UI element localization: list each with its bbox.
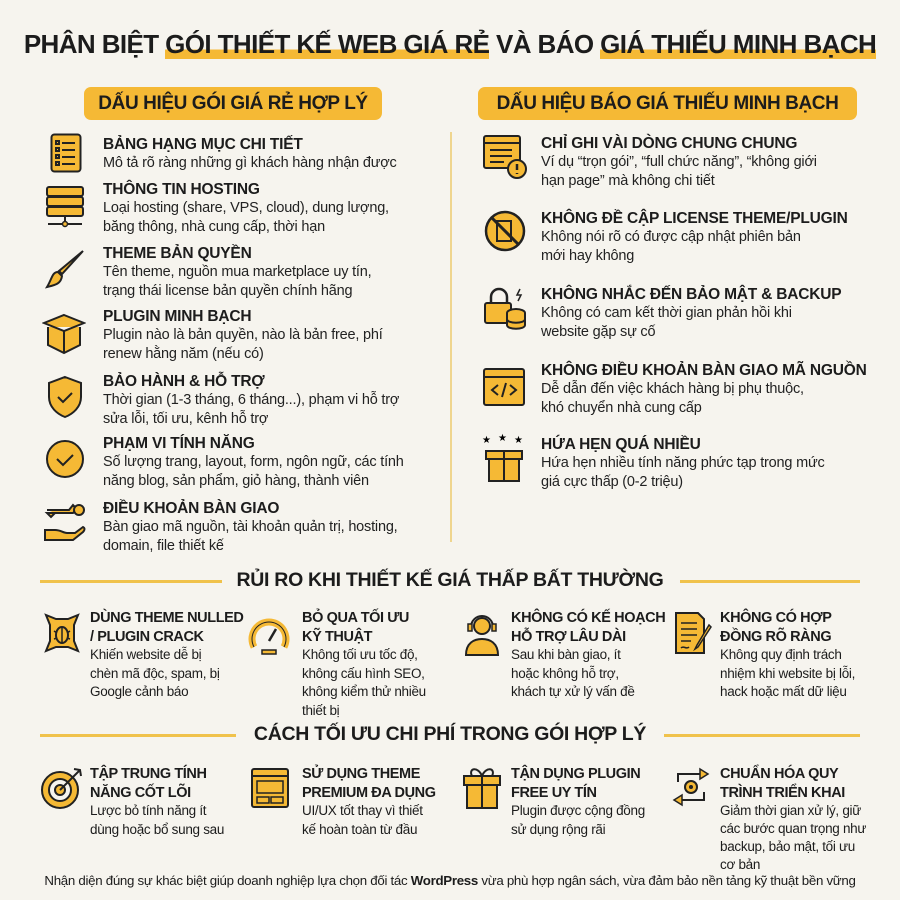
item: điều khoản: domain, file thiết kế	[103, 538, 224, 554]
item: bảo hành	[103, 372, 399, 427]
item: bảo hành: sửa lỗi, tối ưu, kênh hỗ trợ	[103, 411, 268, 427]
item: phạm vi: năng blog, sản phẩm, giỏ hàng, thành viên	[103, 473, 369, 489]
icon: check circle	[46, 440, 84, 478]
icon: box	[42, 314, 86, 354]
item: vài dòng chung chung: Ví dụ “trọn gói”, “full chức năng”, “không giới	[541, 154, 817, 170]
item: theme premium: UI/UX tốt thay vì thiết	[302, 803, 423, 818]
item: hỗ trợ: hoặc không hỗ trợ,	[511, 666, 619, 680]
item: theme premium: kế hoàn toàn từ đầu	[302, 822, 417, 836]
item: license	[541, 208, 848, 264]
right header pill: DẤU HIỆU BÁO GIÁ THIẾU MINH BẠCH	[497, 93, 838, 114]
item: plugin: renew hằng năm (nếu có)	[103, 346, 264, 362]
icon: gift stars: ★	[514, 435, 523, 446]
item: điều khoản: ĐIỀU KHOẢN BÀN GIAO	[103, 500, 279, 517]
item: tối ưu: KỸ THUẬT	[302, 628, 372, 644]
item: vài dòng chung chung: CHỈ GHI VÀI DÒNG CHUNG CHUNG	[541, 135, 797, 152]
item: tập trung: dùng hoặc bổ sung sau	[90, 822, 224, 836]
item: hỗ trợ: HỖ TRỢ LÂU DÀI	[511, 628, 626, 644]
left header pill: DẤU HIỆU GÓI GIÁ RẺ HỢP LÝ	[98, 93, 368, 114]
item: nulled: DÙNG THEME NULLED	[90, 610, 244, 626]
icon: server	[46, 186, 84, 228]
item: plugin free	[511, 765, 645, 839]
icon: checklist	[50, 134, 82, 172]
icon: lock database	[484, 288, 526, 330]
item: hosting: THÔNG TIN HOSTING	[103, 181, 260, 198]
item: hosting: băng thông, nhà cung cấp, thời hạn	[103, 219, 325, 235]
item: mã nguồn	[541, 360, 867, 416]
panel: left column	[42, 134, 404, 554]
item: chuẩn hóa: TRÌNH TRIỂN KHAI	[720, 784, 845, 800]
item: hosting: Loại hosting (share, VPS, cloud), dung lượng,	[103, 200, 389, 216]
item: bảng hạng mục: BẢNG HẠNG MỤC CHI TIẾT	[103, 136, 303, 153]
item: plugin free: sử dụng rộng rãi	[511, 822, 605, 836]
item: plugin free: Plugin được cộng đồng	[511, 803, 645, 818]
item: hợp đồng: KHÔNG CÓ HỢP	[720, 610, 832, 626]
item: hứa hẹn: giá cực thấp (0-2 triệu)	[541, 474, 683, 490]
item: phạm vi	[103, 434, 404, 489]
footer text: Nhận diện đúng sự khác biệt giúp doanh nghiệp lựa chọn đối tác WordPress vừa phù hợp ngân sách, vừa đảm bảo nền tảng kỹ thuật bền vững	[44, 873, 856, 888]
icon: target	[41, 768, 82, 809]
item: bảo mật: KHÔNG NHẮC ĐẾN BẢO MẬT & BACKUP	[541, 286, 841, 303]
icon: gift stars: ★	[482, 435, 491, 446]
item: hợp đồng: ĐỒNG RÕ RÀNG	[720, 628, 831, 644]
item: hỗ trợ	[511, 608, 665, 699]
item: hỗ trợ: Sau khi bàn giao, ít	[511, 647, 621, 662]
item: chuẩn hóa: các bước quan trọng như	[720, 821, 866, 836]
right header pill	[478, 87, 857, 120]
icon: gift stars	[482, 433, 523, 482]
item: hứa hẹn: Hứa hẹn nhiều tính năng phức tạp trong mức	[541, 455, 825, 471]
item: license: mới hay không	[541, 248, 634, 264]
panel: right column	[482, 134, 867, 490]
item: nulled	[90, 608, 244, 699]
item: theme premium: SỬ DỤNG THEME	[302, 766, 420, 782]
item: bảo mật	[541, 284, 842, 340]
item: tối ưu: Không tối ưu tốc độ,	[302, 647, 418, 662]
section heading: risks	[40, 568, 860, 591]
item: nulled: chèn mã độc, spam, bị	[90, 666, 220, 680]
item: bảo hành: BẢO HÀNH & HỖ TRỢ	[103, 373, 264, 390]
item: plugin free: FREE UY TÍN	[511, 784, 597, 800]
item: bảo mật: website gặp sự cố	[541, 324, 655, 340]
item: theme premium	[302, 765, 436, 839]
item: phạm vi: Số lượng trang, layout, form, ngôn ngữ, các tính	[103, 454, 404, 470]
item: tập trung: NĂNG CỐT LÕI	[90, 784, 191, 800]
icon: key hand	[44, 504, 86, 541]
panel: risks row	[44, 608, 855, 718]
item: tối ưu: thiết bị	[302, 702, 339, 718]
item: plugin free: TẬN DỤNG PLUGIN	[511, 766, 640, 782]
icon: contract	[675, 612, 712, 654]
item: hợp đồng: nhiệm khi website bị lỗi,	[720, 666, 855, 680]
item: hợp đồng	[720, 608, 855, 699]
item: theme: Tên theme, nguồn mua marketplace uy tín,	[103, 264, 371, 280]
icon: bug	[44, 613, 80, 653]
item: hỗ trợ: khách tự xử lý vấn đề	[511, 684, 635, 699]
icon: support person	[465, 615, 499, 656]
item: bảng hạng mục	[103, 135, 397, 171]
panel: optimize row	[41, 764, 866, 872]
item: điều khoản	[103, 499, 398, 554]
icon: no license	[484, 210, 526, 252]
icon: gift stars: ★	[498, 433, 507, 444]
icon: gauge	[248, 618, 290, 655]
item: tối ưu	[302, 608, 426, 718]
item: theme: trạng thái license bản quyền chính hãng	[103, 283, 352, 299]
item: mã nguồn: Dễ dẫn đến việc khách hàng bị phụ thuộc,	[541, 381, 804, 397]
item: chuẩn hóa: CHUẨN HÓA QUY	[720, 766, 838, 782]
section heading: risks: RỦI RO KHI THIẾT KẾ GIÁ THẤP BẤT THƯỜNG	[236, 569, 664, 591]
section heading: optimize	[40, 722, 860, 745]
item: phạm vi: PHẠM VI TÍNH NĂNG	[103, 435, 255, 452]
item: theme: THEME BẢN QUYỀN	[103, 245, 252, 262]
item: theme	[103, 244, 371, 299]
left header pill	[84, 87, 382, 120]
item: nulled: Khiến website dễ bị	[90, 647, 201, 662]
item: vài dòng chung chung: hạn page” mà không chi tiết	[541, 173, 715, 189]
item: plugin	[103, 308, 383, 362]
item: tập trung: TẬP TRUNG TÍNH	[90, 766, 207, 782]
item: tập trung	[90, 765, 224, 839]
icon: code window	[483, 368, 525, 406]
item: tập trung: Lược bỏ tính năng ít	[90, 803, 206, 818]
item: vài dòng chung chung	[541, 134, 817, 189]
item: chuẩn hóa: Giảm thời gian xử lý, giữ	[720, 803, 861, 818]
item: tối ưu: BỎ QUA TỐI ƯU	[302, 610, 409, 626]
item: tối ưu: không cấu hình SEO,	[302, 666, 425, 680]
item: plugin: Plugin nào là bản quyền, nào là bản free, phí	[103, 327, 383, 343]
icon: layout	[250, 767, 290, 809]
item: hỗ trợ: KHÔNG CÓ KẾ HOẠCH	[511, 610, 665, 626]
item: hosting	[103, 180, 389, 235]
item: theme premium: PREMIUM ĐA DỤNG	[302, 784, 436, 800]
icon: gift	[461, 764, 503, 810]
item: bảo mật: Không có cam kết thời gian phản hồi khi	[541, 305, 792, 321]
item: bảng hạng mục: Mô tả rõ ràng những gì khách hàng nhận được	[103, 155, 397, 171]
icon: brush	[45, 250, 84, 288]
title: PHÂN BIỆT GÓI THIẾT KẾ WEB GIÁ RẺ VÀ BÁO GIÁ THIẾU MINH BẠCH	[24, 29, 876, 59]
item: nulled: Google cảnh báo	[90, 684, 188, 699]
icon: process gear	[670, 766, 712, 810]
item: mã nguồn: khó chuyển nhà cung cấp	[541, 400, 702, 416]
item: hứa hẹn	[541, 434, 825, 490]
item: chuẩn hóa: backup, bảo mật, tối ưu	[720, 839, 855, 854]
icon: browser warning	[483, 135, 527, 179]
section heading: optimize: CÁCH TỐI ƯU CHI PHÍ TRONG GÓI HỢP LÝ	[254, 723, 646, 745]
item: license: KHÔNG ĐỀ CẬP LICENSE THEME/PLUGIN	[541, 210, 848, 227]
item: tối ưu: không kiểm thử nhiều	[302, 684, 426, 699]
item: mã nguồn: KHÔNG ĐIỀU KHOẢN BÀN GIAO MÃ NGUỒN	[541, 362, 867, 379]
item: nulled: / PLUGIN CRACK	[90, 628, 204, 644]
icon: shield	[48, 376, 82, 418]
item: điều khoản: Bàn giao mã nguồn, tài khoản quản trị, hosting,	[103, 519, 398, 535]
item: hợp đồng: Không quy định trách	[720, 647, 842, 662]
item: chuẩn hóa	[720, 765, 866, 874]
item: license: Không nói rõ có được cập nhật phiên bản	[541, 229, 801, 245]
item: chuẩn hóa: cơ bản	[720, 857, 760, 872]
item: bảo hành: Thời gian (1-3 tháng, 6 tháng...), phạm vi hỗ trợ	[103, 392, 399, 408]
item: hợp đồng: hack hoặc mất dữ liệu	[720, 684, 847, 699]
item: hứa hẹn: HỨA HẸN QUÁ NHIỀU	[541, 436, 701, 453]
item: plugin: PLUGIN MINH BẠCH	[103, 308, 251, 325]
